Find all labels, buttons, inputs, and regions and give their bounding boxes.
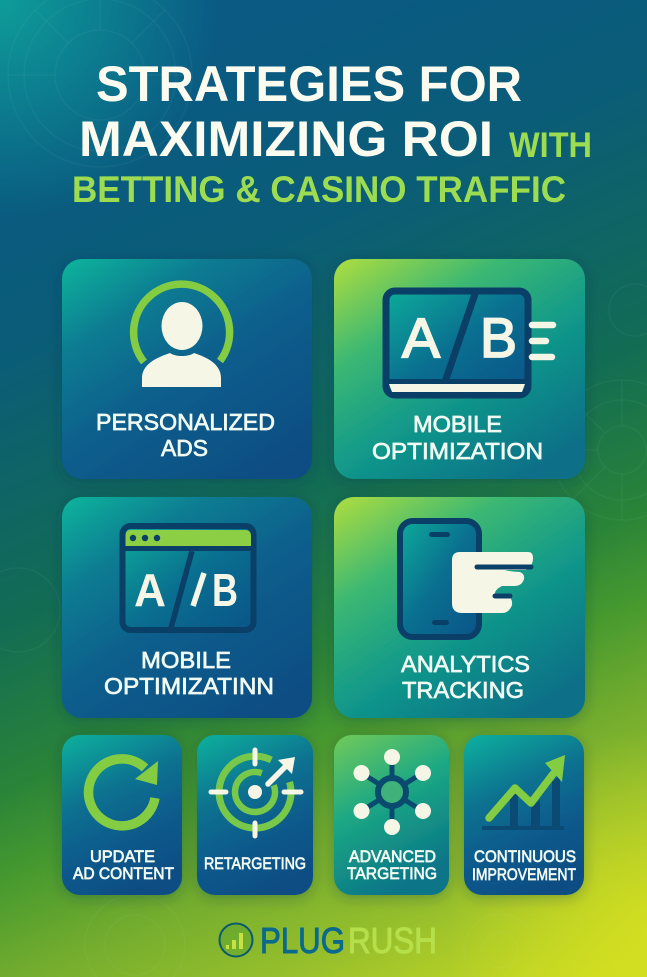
title bbox=[72, 56, 592, 210]
icon: logo bars in circle bbox=[220, 924, 252, 956]
label: PERSONALIZED bbox=[96, 409, 275, 435]
label: AD CONTENT bbox=[73, 864, 174, 883]
label: ADVANCED bbox=[349, 847, 436, 866]
label: ADS bbox=[161, 435, 208, 461]
label bbox=[401, 651, 530, 703]
logo: PlugRush bbox=[220, 920, 437, 961]
panel: continuous improvement bbox=[464, 735, 584, 895]
label: MOBILE bbox=[413, 411, 502, 437]
icon: A/B browser window bbox=[122, 526, 254, 630]
panel: personalized ads bbox=[62, 259, 312, 479]
icon: A/B laptop: B bbox=[480, 306, 517, 369]
icon: A/B laptop: A bbox=[402, 306, 441, 369]
icon: phone and swiping hand bbox=[400, 521, 533, 637]
label: RETARGETING bbox=[204, 854, 306, 873]
label: OPTIMIZATINN bbox=[104, 673, 274, 699]
icon: person in ring bbox=[134, 284, 230, 387]
label bbox=[372, 411, 543, 464]
icon: target with arrow bbox=[211, 750, 301, 836]
panel: retargeting bbox=[197, 735, 313, 895]
title: BETTING & CASINO TRAFFIC bbox=[72, 169, 566, 210]
label: TRACKING bbox=[402, 677, 524, 703]
icon: A/B laptop bbox=[386, 291, 553, 395]
icon: A/B browser window: A bbox=[134, 564, 166, 616]
panel: update ad content bbox=[62, 735, 182, 895]
label: ANALYTICS bbox=[401, 651, 530, 677]
title: STRATEGIES FOR bbox=[96, 56, 522, 112]
title: MAXIMIZING ROI bbox=[79, 111, 493, 167]
label: TARGETING bbox=[347, 864, 437, 883]
panel: mobile optimizatinn (A/B window) bbox=[62, 497, 312, 718]
label: CONTINUOUS bbox=[474, 847, 576, 866]
icon: network hub bbox=[354, 749, 431, 835]
icon: rising chart bbox=[482, 755, 565, 830]
panel: analytics tracking bbox=[334, 497, 585, 718]
panel: mobile optimization (A/B laptop) bbox=[334, 259, 585, 479]
icon: refresh arrow bbox=[88, 759, 158, 826]
panel: advanced targeting bbox=[334, 735, 449, 895]
label bbox=[104, 647, 274, 699]
label: UPDATE bbox=[90, 847, 155, 866]
label bbox=[96, 409, 275, 461]
label bbox=[472, 847, 576, 884]
title: WITH bbox=[509, 126, 592, 165]
label: IMPROVEMENT bbox=[472, 865, 576, 884]
label bbox=[347, 847, 437, 883]
logo: PlugRush: PLUG bbox=[260, 920, 345, 961]
label: MOBILE bbox=[141, 647, 231, 673]
icon: A/B browser window: B bbox=[212, 564, 238, 616]
label bbox=[73, 847, 174, 883]
logo: PlugRush: RUSH bbox=[348, 920, 437, 961]
label: OPTIMIZATION bbox=[372, 438, 543, 464]
